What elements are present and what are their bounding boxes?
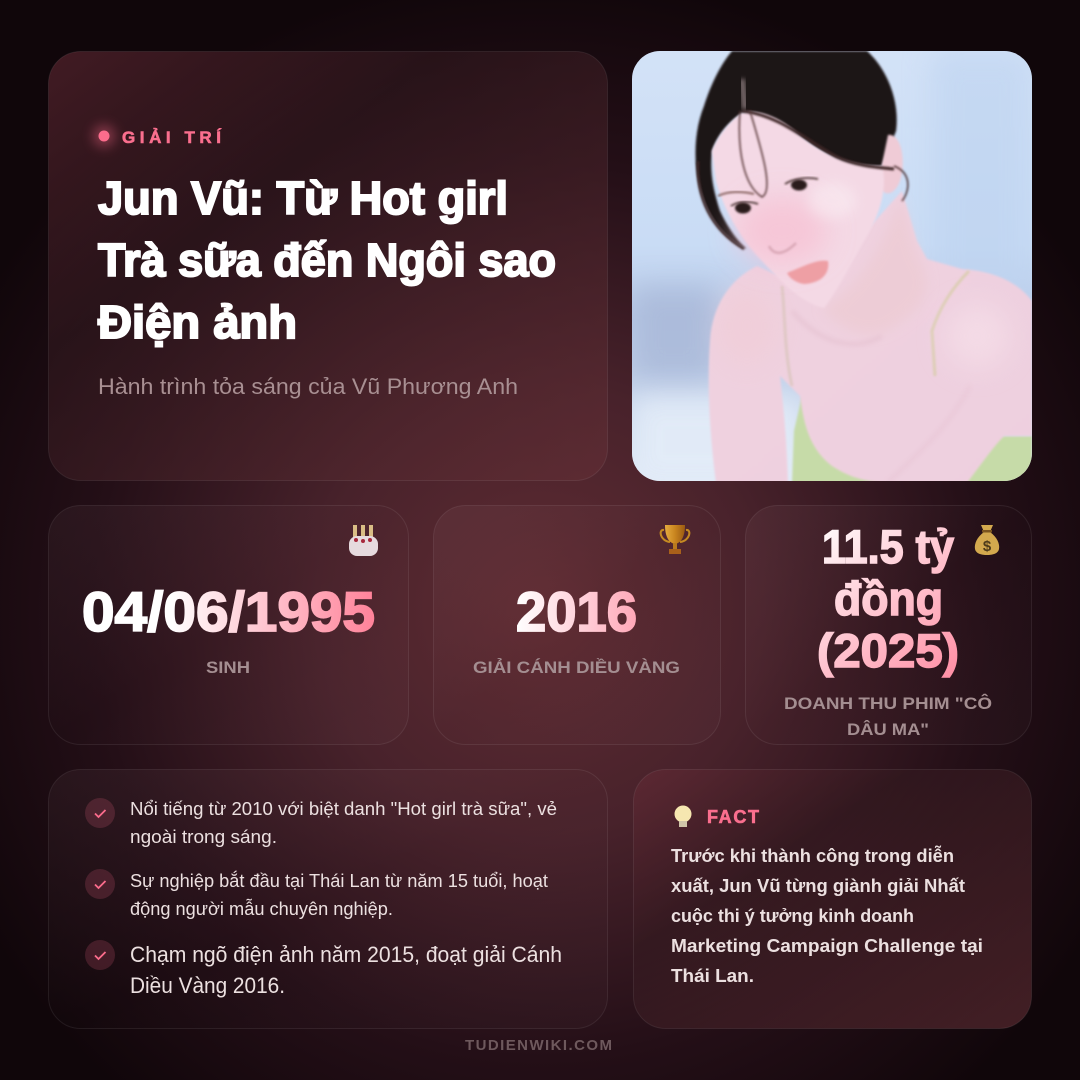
- value: (2025): [817, 624, 959, 677]
- subtitle: Hành trình tỏa sáng của Vũ Phương Anh: [98, 374, 518, 399]
- list item 3: [85, 940, 562, 998]
- fact text: cuộc thi ý tưởng kinh doanh: [671, 906, 914, 926]
- fact text: Marketing Campaign Challenge tại: [671, 936, 983, 956]
- icon: money bag: $: [983, 538, 992, 555]
- fact heading: FACT: [707, 807, 759, 827]
- list item 1: Nổi tiếng từ 2010 với biệt danh "Hot girl trà sữa", vẻ: [130, 799, 557, 819]
- value: [817, 520, 959, 677]
- ear: [878, 135, 903, 193]
- portrait photo: [632, 51, 1032, 486]
- title: Trà sữa đến Ngôi sao: [98, 234, 556, 286]
- neck and chest shading: [838, 227, 919, 326]
- list item 3: Diều Vàng 2016.: [130, 973, 285, 998]
- value: 2016: [516, 580, 637, 643]
- panel: fact: [634, 770, 1032, 1028]
- list item 3: Chạm ngõ điện ảnh năm 2015, đoạt giải Cánh: [130, 942, 562, 967]
- body: [709, 191, 1032, 483]
- panel: highlights list: [48, 770, 608, 1028]
- list item 2: [85, 869, 548, 919]
- label: [784, 694, 992, 739]
- title: [98, 172, 556, 348]
- value: 11.5 tỷ: [822, 520, 954, 573]
- panel: birth date stat: [48, 506, 408, 744]
- category tag: GIẢI TRÍ: [122, 128, 222, 147]
- right forearm highlight: [887, 386, 970, 483]
- dress base: [792, 396, 1032, 483]
- fact text: Trước khi thành công trong diễn: [671, 845, 954, 866]
- panel: hero title: [48, 52, 608, 480]
- icon: light bulb: [674, 806, 692, 827]
- footer source: TUDIENWIKI.COM: [465, 1037, 612, 1054]
- value: đồng: [834, 572, 943, 625]
- title: Jun Vũ: Từ Hot girl: [98, 172, 508, 224]
- list item 1: ngoài trong sáng.: [130, 827, 277, 847]
- category tag: [93, 125, 222, 147]
- fact text: Thái Lan.: [671, 966, 754, 986]
- label: DÂU MA": [847, 720, 929, 739]
- fact text: xuất, Jun Vũ từng giành giải Nhất: [671, 876, 965, 896]
- forelock strands: [742, 111, 894, 169]
- label: DOANH THU PHIM "CÔ: [784, 694, 992, 713]
- nose: [769, 243, 796, 253]
- eyes and brows: [718, 192, 754, 196]
- label: GIẢI CÁNH DIỀU VÀNG: [473, 658, 680, 677]
- list item 1: [85, 798, 557, 847]
- face: [712, 112, 884, 308]
- icon: trophy: [661, 525, 689, 554]
- panel: award stat: [434, 506, 720, 744]
- lips: [787, 261, 828, 284]
- fact text: [671, 845, 983, 986]
- straps: [932, 271, 969, 376]
- value: 04/06/1995: [82, 580, 375, 643]
- hair: [696, 51, 897, 249]
- cheek blush: [736, 197, 828, 265]
- label: SINH: [206, 658, 250, 677]
- list item 2: động người mẫu chuyên nghiệp.: [130, 898, 393, 919]
- icon: birthday cake: [349, 525, 378, 556]
- title: Điện ảnh: [98, 296, 297, 348]
- icon: money bag: [975, 525, 999, 555]
- list item 2: Sự nghiệp bắt đầu tại Thái Lan từ năm 15 tuổi, hoạt: [130, 870, 548, 891]
- panel: box office stat: [746, 506, 1032, 744]
